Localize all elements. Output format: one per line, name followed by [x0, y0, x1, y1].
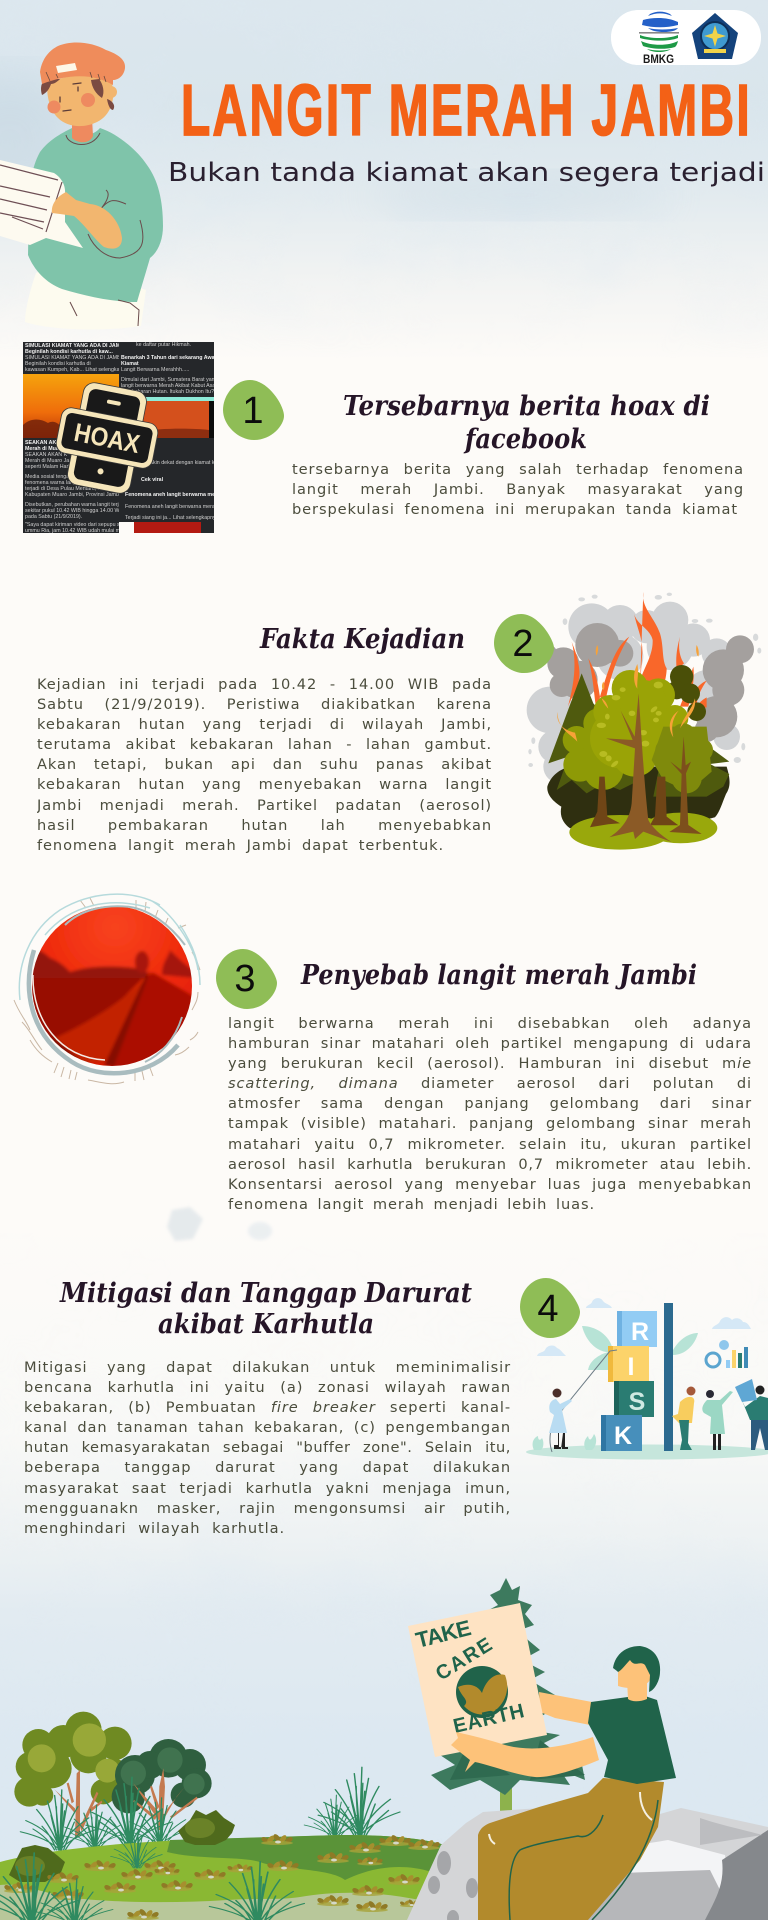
front tuft left	[0, 1853, 78, 1920]
person with calculator	[735, 1379, 768, 1450]
icon: shield emblem	[692, 13, 738, 59]
text block 4: kanal dan tanaman tahan kebakaran, (c) pengembangan	[24, 1419, 511, 1436]
left feed text: seperti Malam Hari, P	[25, 464, 76, 470]
back trunks	[590, 777, 678, 827]
left feed text: ummu Ria, jam 10.42 WIB udah mulai merah	[25, 528, 131, 534]
near arm and hand	[451, 1732, 599, 1777]
arm and hand	[52, 192, 122, 249]
smoke droplets	[528, 593, 761, 767]
ground ellipses	[569, 815, 671, 850]
left feed text: Beginilah kondisi karhutla di	[25, 361, 91, 367]
text block 3: langit berwarna merah ini disebabkan oleh adanya	[228, 1015, 752, 1032]
ground plants	[3, 1833, 441, 1920]
text block 1: langit merah Jambi. Banyak masyarakat yang	[292, 481, 744, 498]
ruler	[664, 1303, 673, 1451]
clouds	[537, 1298, 751, 1356]
eyes and mouth	[60, 83, 81, 111]
mid tuft	[111, 1829, 162, 1868]
left feed text: SEAKAN AKAN K	[25, 452, 68, 458]
text block 2: Kejadian ini terjadi pada 10.42 - 14.00 WIB pada	[37, 676, 492, 693]
right feed text: akin dekat dengan kiamat kubraa..	[150, 460, 231, 466]
landscape scene	[0, 1578, 768, 1920]
crown spots	[597, 682, 663, 768]
teal strip	[119, 397, 214, 401]
poster EARTH: EARTH	[451, 1700, 526, 1738]
hat ribs	[46, 72, 106, 82]
heading 1: facebook	[463, 424, 587, 455]
S block	[614, 1381, 654, 1417]
text block 2	[37, 676, 492, 854]
number badge 3: 3	[234, 958, 256, 1000]
treeline left	[20, 948, 146, 978]
green sweater	[28, 128, 163, 302]
logo pill	[611, 10, 761, 66]
white and red corner	[119, 522, 134, 533]
left feed text: Beginilah kondisi karhutla di kaw...	[25, 349, 113, 355]
heading 4: akibat Karhutla	[158, 1309, 374, 1340]
person hair	[613, 1646, 660, 1692]
text block 4: bencana karhutla ini yaitu (a) zonasi wilayah rawan	[24, 1379, 511, 1396]
central trunk	[606, 693, 672, 842]
text block 3: fenomena langit merah menjadi lebih luas.	[228, 1196, 595, 1213]
neck	[72, 118, 93, 142]
panel 4: RISK illustration	[526, 1298, 768, 1460]
left feed text: Media sosial tengah d	[25, 474, 77, 480]
rope	[550, 1350, 617, 1452]
text block 2: fenomena langit merah Jambi dapat terbentuk.	[37, 837, 444, 854]
left feed text: Merah di Muaro J	[25, 446, 69, 452]
text block 3: yang berukuran kecil (aerosol). Hamburan ini disebut mie	[228, 1055, 752, 1072]
heading 1	[343, 391, 710, 455]
I block: I	[628, 1353, 634, 1381]
red photo	[138, 401, 209, 438]
shrub left	[9, 1845, 65, 1882]
right feed text: Langit Berwarna Merahhh.....	[121, 367, 189, 373]
number badge 1: 1	[242, 390, 264, 432]
illustration: person reading paper	[0, 43, 163, 329]
olive tree	[14, 1712, 132, 1837]
red photo disc	[32, 906, 192, 1066]
text block 3: matahari yaitu 0,7 mikrometer. selain itu, ukuran partikel	[228, 1136, 752, 1153]
lower edge	[50, 1037, 88, 1062]
text block 3: tampak (visible) matahari. panjang gelombang sinar merah	[228, 1115, 752, 1132]
text block 2: Sabtu (21/9/2019). Peristiwa diakibatkan karena	[37, 696, 492, 713]
left feed text: Disebutkan, perubahan warna langit terjadi	[25, 502, 126, 508]
dark leaf clump	[667, 665, 706, 721]
ear	[105, 86, 117, 98]
right feed text: Benarkah 3 Tahun dari sekarang Awal Tanda	[121, 355, 233, 361]
text block 3: atmosfer sama dengan panjang gelombang dari sinar	[228, 1095, 752, 1112]
hat label	[56, 63, 77, 73]
person shirt	[588, 1695, 676, 1784]
front tuft left 2	[35, 1879, 113, 1920]
text block 4	[24, 1359, 511, 1537]
right feed text: langit berwarna Merah Akibat Kabut Asap	[121, 383, 218, 389]
left feed text: Kabupaten Muaro Jambi, Provinsi Jambi.	[25, 492, 122, 498]
person with yellow shirt	[672, 1386, 696, 1450]
pine tree	[431, 1578, 585, 1812]
pale lower ground	[0, 1885, 420, 1920]
tuft near right of hill 2	[304, 1795, 364, 1838]
left feed text: kawasan Kumpeh, Kab... Lihat selengkapnya	[25, 367, 131, 373]
number badge 3	[216, 949, 277, 1009]
person in teal dress	[702, 1390, 733, 1450]
badge label: HOAX	[72, 417, 143, 459]
tree mid	[135, 951, 149, 973]
text block 2: kebakaran hutan yang menyebakan warna langit	[37, 776, 492, 793]
ground	[526, 1444, 768, 1460]
central crown	[590, 670, 688, 777]
pants highlights	[489, 1792, 652, 1844]
heading 4: Mitigasi dan Tanggap Darurat	[59, 1278, 472, 1309]
dark field	[20, 972, 150, 1042]
heading 4	[59, 1278, 472, 1340]
grass behind trees	[20, 1790, 98, 1850]
teal swoosh	[19, 894, 200, 1000]
right feed text: Cek viral	[141, 477, 164, 483]
cheeks	[81, 93, 95, 107]
text block 4: mengguanakn masker, rajin mengonsumsi air putih,	[24, 1500, 511, 1517]
R block	[617, 1311, 657, 1347]
pants seams	[509, 1800, 658, 1920]
paper lines	[0, 165, 62, 232]
dark background forest	[547, 767, 730, 828]
grass behind trees 2	[86, 1777, 172, 1846]
far arm	[539, 1692, 592, 1725]
text block 3: scattering, dimana diameter aerosol dari polutan di	[228, 1075, 752, 1092]
panel 2: forest fire illustration	[527, 592, 761, 850]
grass behind trees 3	[60, 1805, 129, 1848]
text block 4: menghindari wilayah karhutla.	[24, 1520, 285, 1537]
front tuft middle	[210, 1862, 304, 1920]
text block 4: beberapa tanggap darurat yang dapat dilakukan	[24, 1459, 511, 1476]
K block	[601, 1415, 642, 1451]
tree silhouette	[23, 419, 119, 438]
light green hill	[0, 1835, 445, 1920]
hoax phone badge	[49, 378, 165, 498]
left tree crown	[563, 708, 623, 790]
number badge 4: 4	[537, 1288, 559, 1330]
paper	[0, 160, 83, 248]
text block 2: terutama akibat kebakaran lahan - lahan gambut.	[37, 736, 492, 753]
left feed text: SIMULASI KIAMAT YANG ADA DI JAMBI	[25, 355, 122, 361]
left feed text: fenomena warna langit	[25, 480, 79, 486]
photo dark bar	[209, 401, 214, 438]
orange sky photo	[23, 374, 119, 438]
text block 2: hasil pembakaran hutan lah menyebabkan	[37, 817, 492, 834]
R block: R	[631, 1318, 649, 1346]
text block 1: tersebarnya berita yang salah terhadap fenomena	[292, 461, 744, 478]
pants	[25, 262, 146, 329]
left feed text: Merah di Muaro Ja	[25, 458, 69, 464]
S block: S	[629, 1388, 645, 1416]
hair	[41, 79, 114, 110]
tree right	[162, 950, 196, 978]
right tree crown	[652, 723, 713, 793]
dark hill band	[167, 1835, 445, 1880]
text block 3	[228, 1015, 752, 1213]
text block 4: hutan kemasyarakatan sebagai "buffer zone". Selain itu,	[24, 1439, 511, 1456]
sweater collar and fold lines	[66, 133, 143, 326]
back conifers	[548, 673, 729, 797]
subtitle: Bukan tanda kiamat akan segera terjadi	[168, 158, 765, 188]
right feed text: Kiamat	[121, 361, 139, 367]
number badge 2: 2	[512, 623, 534, 665]
text block 1: berspekulasi fenomena ini merupakan tanda kiamat	[292, 501, 738, 518]
heading 2: Fakta Kejadian	[259, 624, 465, 655]
hatch ring	[14, 898, 200, 1084]
text block 3: Konsentarsi aerosol yang menyebar luas juga menyebabkan	[228, 1176, 752, 1193]
left feed text: pada Sabtu (21/9/2019).	[25, 514, 82, 520]
right trunk	[669, 737, 702, 834]
dark tree	[112, 1739, 212, 1830]
text block 3: hamburan sinar matahari oleh partikel mengapung di udara	[228, 1035, 752, 1052]
text block 1	[292, 461, 744, 518]
left feed text: sekitar pukul 10.42 WIB hingga 14.00 WIB	[25, 508, 125, 514]
shrub right	[178, 1810, 235, 1845]
text block 2: kebakaran hutan yang terjadi di wilayah Jambi,	[37, 716, 492, 733]
I block	[608, 1346, 649, 1382]
left feed text: SIMULASI KIAMAT YANG ADA DI JAMBI	[25, 343, 126, 349]
grass behind trees 4	[125, 1798, 194, 1845]
number badge 1	[223, 380, 284, 440]
text block 2: Jambi menjadi merah. Partikel padatan (aerosol)	[37, 797, 492, 814]
person face	[618, 1650, 650, 1688]
text block 2: Akan tetapi, bukan api dan suhu panas akibat	[37, 756, 492, 773]
poster TAKE: TAKE	[413, 1615, 474, 1653]
charts	[706, 1340, 748, 1368]
photo ground	[138, 429, 209, 438]
heading 1: Tersebarnya berita hoax di	[343, 391, 710, 422]
right feed text: Fenomena aneh langit berwarna merah.	[125, 492, 225, 498]
text block 3: aerosol hasil karhutla berukuran 0,7 mikrometer atau lebih.	[228, 1156, 752, 1173]
ember wisps	[557, 645, 699, 742]
road	[110, 972, 192, 1066]
left feed text: "Saya dapat kiriman video dari sepupu saya,	[25, 522, 130, 528]
icon: BMKG logo: BMKG	[643, 54, 674, 66]
bank	[55, 975, 148, 1062]
right feed text: Pembakaran Hutan. Itukah Dukhon Itu?	[121, 389, 214, 395]
heading 3: Penyebab langit merah Jambi	[300, 960, 697, 991]
tuft near right of hill	[318, 1767, 400, 1836]
number badge 4	[520, 1278, 580, 1338]
head	[47, 76, 113, 126]
right feed text: Dimulai dari Jambi, Sumatera Barat yang	[121, 377, 218, 383]
hat	[40, 43, 125, 85]
icon: BMKG logo	[639, 12, 679, 66]
person neck	[627, 1680, 647, 1701]
right feed text: Fenomena aneh langit berwarna merah.	[125, 504, 219, 510]
plant tufts	[533, 1434, 596, 1450]
right feed text: Terjadi siang ini ja... Lihat selengkapnya	[125, 515, 219, 521]
left feed text: SEAKAN AKAN K	[25, 440, 69, 446]
leaves	[582, 1326, 698, 1370]
K block: K	[614, 1422, 632, 1450]
poster globe	[456, 1666, 508, 1718]
flames	[567, 592, 707, 732]
panel 1: facebook hoax screenshot	[23, 342, 214, 533]
poster CARE: CARE	[432, 1634, 496, 1685]
text block 4: masyarakat saat terjadi karhutla yakni menjaga imun,	[24, 1480, 511, 1497]
right feed text	[121, 342, 214, 520]
person pants	[478, 1778, 664, 1920]
text block 4: Mitigasi yang dapat dilakukan untuk meminimalisir	[24, 1359, 511, 1376]
right feed text: ke daftar putar Hikmah.	[136, 342, 191, 348]
road edge	[104, 975, 149, 1066]
left feed text	[25, 343, 119, 533]
person with rope	[549, 1388, 572, 1449]
grey brush rings	[29, 906, 185, 1073]
left feed text: terjadi di Desa Pulau Mentaro, Kecamatan	[25, 486, 125, 492]
rock	[407, 1808, 768, 1920]
smoke dark	[540, 623, 754, 742]
text block 4: kebakaran, (b) Pembuatan fire breaker seperti kanal-	[24, 1399, 511, 1416]
poster	[408, 1603, 547, 1757]
number badge 2	[494, 614, 554, 673]
smoke light	[527, 602, 740, 783]
panel 3: red sky photo	[14, 894, 210, 1084]
